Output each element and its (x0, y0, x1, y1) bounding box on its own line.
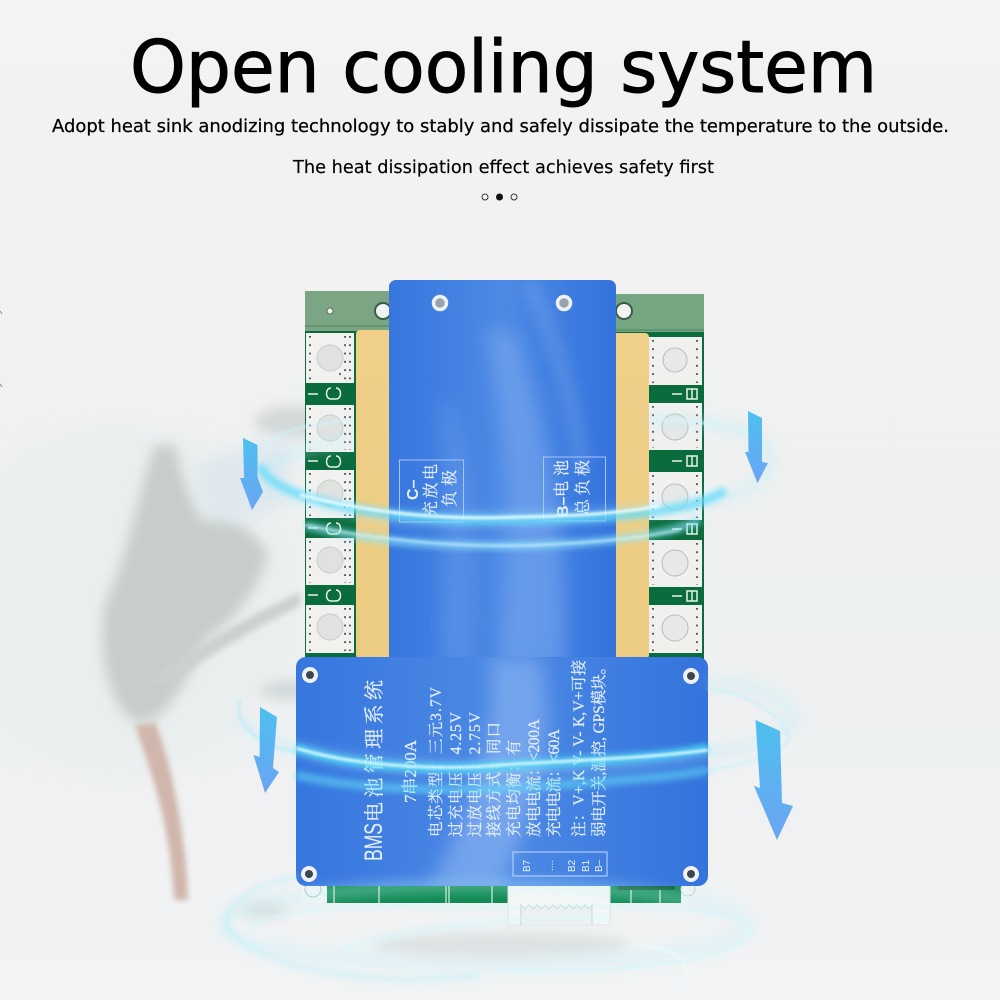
upper blue heat sink plate (389, 280, 616, 670)
small marks at left edge (0, 311, 2, 387)
bottom PCB edge (302, 881, 695, 903)
model line: 7串200A (401, 739, 420, 803)
specification lines (427, 659, 608, 837)
label box B-: 总负极 (573, 460, 592, 515)
title: Open cooling system (130, 25, 877, 109)
specification lines: 电芯类型：三元3.7V (427, 686, 445, 837)
terminal pads left (306, 333, 354, 653)
green PCB left (305, 291, 395, 661)
arrow: lower left (254, 707, 279, 793)
subtitle line: Adopt heat sink anodizing technology to stably and safely dissipate the temperature to the outside. (52, 116, 949, 137)
cooling swirl: lower (223, 876, 752, 990)
gold copper strips (356, 330, 649, 659)
pad labels right (672, 389, 697, 601)
cooling swirl: middle (239, 682, 795, 789)
pad labels left (308, 388, 340, 601)
plate heading: BMS (360, 823, 388, 861)
connector pin legend: B1 (581, 859, 592, 872)
label box B- (544, 457, 606, 521)
green PCB right (610, 294, 704, 659)
terminal pads right (648, 337, 702, 653)
connector pin legend (513, 852, 607, 876)
arrow: upper right (745, 411, 768, 483)
specification lines: 放电电流：<200A (525, 718, 543, 837)
label box C-: 负极 (440, 470, 459, 507)
connector pin legend: .... (545, 860, 556, 871)
arrow: lower right (754, 720, 793, 840)
BMS circuit board assembly (296, 280, 708, 925)
label box C- (400, 460, 464, 522)
plate heading Chinese: 电池管理系统 (363, 680, 386, 822)
mounting screws (434, 296, 570, 310)
white connector (508, 884, 610, 925)
lower blue BMS plate (296, 657, 708, 886)
specification lines: 注：V+,K V- V- K,V+可接 (570, 660, 588, 837)
pagination dots (482, 194, 517, 200)
label box C-: C– (405, 479, 422, 500)
label box C-: 充放电 (422, 464, 440, 517)
specification lines: 充电均衡：有 (505, 740, 523, 837)
specification lines: 充电电流：<60A (545, 728, 563, 837)
label box B-: B– (555, 496, 572, 517)
label box B-: 电池 (553, 460, 571, 497)
connector pin legend: B– (594, 859, 605, 872)
specification lines: 过放电压：2.75V (466, 711, 484, 837)
connector pin legend: B2 (567, 859, 578, 872)
specification lines: 过充电压：4.25V (447, 711, 465, 837)
arrow: upper left (240, 438, 263, 510)
mounting screws (303, 669, 697, 880)
connector pin legend: B7 (522, 859, 533, 872)
blurred palm tree (103, 440, 300, 900)
specification lines: 弱电开关,温控, GPS模块。 (589, 659, 608, 837)
specification lines: 接线方式：同口 (485, 722, 503, 837)
secondary subtitle: The heat dissipation effect achieves safety first (292, 157, 714, 178)
cooling swirl: upper (260, 420, 775, 546)
